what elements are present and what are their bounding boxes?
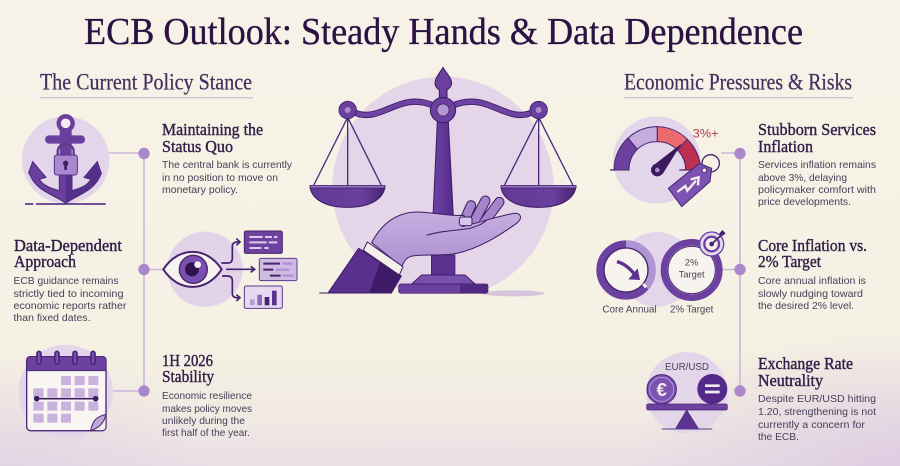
icon: EUR/USD balance: € [656, 379, 667, 400]
gauge value: 3%+ [693, 127, 719, 141]
item: exchange rate neutrality: 1.20, strengthening is not [758, 406, 876, 418]
target label: 2% [685, 257, 698, 267]
column and base [433, 122, 453, 217]
item: maintaining the status quo: The central bank is currently [162, 159, 293, 171]
item: data-dependent approach: ECB guidance remains [14, 275, 118, 287]
item: stubborn services inflation: Stubborn Services [758, 120, 876, 139]
item: 1H 2026 stability: Stability [162, 367, 215, 386]
central illustration: balance scale on a hand [310, 67, 576, 307]
beam [355, 102, 532, 115]
item: 1H 2026 stability: makes policy moves [162, 403, 252, 415]
target icon [700, 230, 726, 256]
icon: core inflation versus target rings: 2% Target [670, 304, 714, 315]
item: exchange rate neutrality: currently a concern for [758, 419, 866, 431]
icon: calendar [19, 345, 113, 439]
item: data-dependent approach: strictly tied to incoming [14, 288, 124, 300]
icon: inflation gauge with price tag [610, 116, 719, 207]
item: 1H 2026 stability: unlikely during the [162, 415, 245, 427]
icon: core inflation versus target rings: Core Annual [602, 304, 657, 315]
item: stubborn services inflation [758, 120, 876, 208]
item: exchange rate neutrality: Despite EUR/USD hitting [758, 393, 876, 405]
item: core inflation vs target [758, 236, 867, 312]
item: 1H 2026 stability [162, 351, 252, 439]
item: core inflation vs target: the desired 2% level. [758, 300, 854, 312]
item: data-dependent approach [14, 236, 127, 324]
section heading: economic pressures: Economic Pressures & Risks [624, 70, 852, 94]
item: stubborn services inflation: Services inflation remains [758, 159, 876, 171]
left timeline connector [108, 148, 166, 397]
item: core inflation vs target: Core Inflation vs. [758, 236, 867, 255]
sleeve and cuff [328, 248, 401, 293]
panel: the current policy stance [14, 70, 297, 439]
item: data-dependent approach: Data-Dependent [14, 236, 122, 255]
item: stubborn services inflation: policymaker comfort with [758, 184, 876, 196]
item: data-dependent approach: economic reports rather [14, 300, 127, 312]
hand [466, 201, 499, 223]
item: 1H 2026 stability: Economic resilience [162, 390, 252, 402]
item: exchange rate neutrality: Neutrality [758, 371, 824, 390]
section heading: current policy stance: The Current Policy Stance [40, 70, 252, 94]
icon: eye with data cards [163, 231, 297, 308]
item: 1H 2026 stability: first half of the year. [162, 427, 250, 439]
item: exchange rate neutrality [758, 354, 876, 443]
item: data-dependent approach: Approach [14, 252, 77, 271]
item: stubborn services inflation: price developments. [758, 196, 851, 208]
item: exchange rate neutrality: the ECB. [758, 431, 799, 443]
right timeline connector [715, 148, 746, 397]
item: core inflation vs target: Core annual inflation is [758, 275, 866, 287]
icon: core inflation versus target rings: Target [679, 269, 705, 279]
item: core inflation vs target: slowly nudging toward [758, 288, 863, 300]
icon: core inflation versus target rings [600, 230, 726, 315]
item: maintaining the status quo: monetary policy. [162, 184, 238, 196]
icon: EUR/USD balance [646, 352, 727, 433]
item: core inflation vs target: 2% Target [758, 252, 821, 271]
item: stubborn services inflation: above 3%, delaying [758, 172, 847, 184]
item: stubborn services inflation: Inflation [758, 137, 813, 156]
panel: economic pressures and risks [600, 70, 876, 443]
icon: anchor with padlock [22, 116, 109, 204]
item: data-dependent approach: than fixed dates. [14, 312, 90, 324]
icon: EUR/USD balance: EUR/USD [665, 362, 709, 373]
item: 1H 2026 stability: 1H 2026 [162, 351, 213, 370]
title: ECB Outlook: Steady Hands & Data Dependence [84, 11, 803, 53]
scale chains and pans [313, 117, 573, 186]
item: maintaining the status quo [162, 120, 293, 196]
item: exchange rate neutrality: Exchange Rate [758, 354, 853, 373]
item: maintaining the status quo: Status Quo [162, 137, 233, 156]
item: maintaining the status quo: Maintaining the [162, 120, 263, 139]
item: maintaining the status quo: in no position to move on [162, 172, 278, 184]
